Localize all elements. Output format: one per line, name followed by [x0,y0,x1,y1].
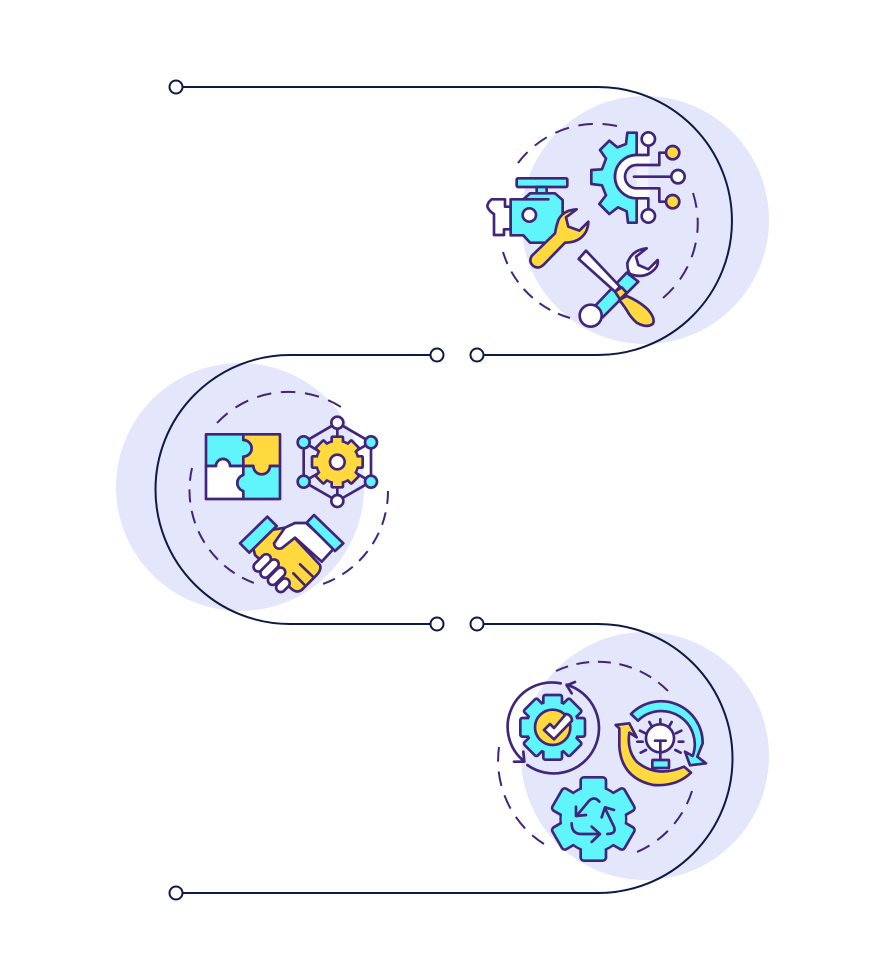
icon: gear in network hexagon [298,417,377,507]
icon: gear with recycle arrows [551,777,636,861]
icon: puzzle [206,434,280,499]
step 2 icons [206,417,377,594]
dashed ring: step 3 [498,662,692,852]
step 1 icons [487,132,685,327]
icon: engine with wrench [487,178,588,267]
connector line: step 3 [170,618,732,900]
connector line: step 2 [156,348,444,630]
icon: lightbulb with cycle arrows [616,701,706,785]
dashed ring: step 2 [189,392,388,584]
step 3 icons [508,682,706,861]
icon: gear with check and cycle arrows [508,682,599,773]
icon: half gear with circuit [591,132,685,223]
background blob: step 3 [521,632,769,880]
dashed ring: step 1 [503,124,698,318]
background blob: step 2 [116,363,364,611]
icon: handshake [240,515,343,594]
background blob: step 1 [521,96,769,344]
icon: crossed screwdriver and wrench [579,248,658,327]
connector line: step 1 [170,80,732,362]
